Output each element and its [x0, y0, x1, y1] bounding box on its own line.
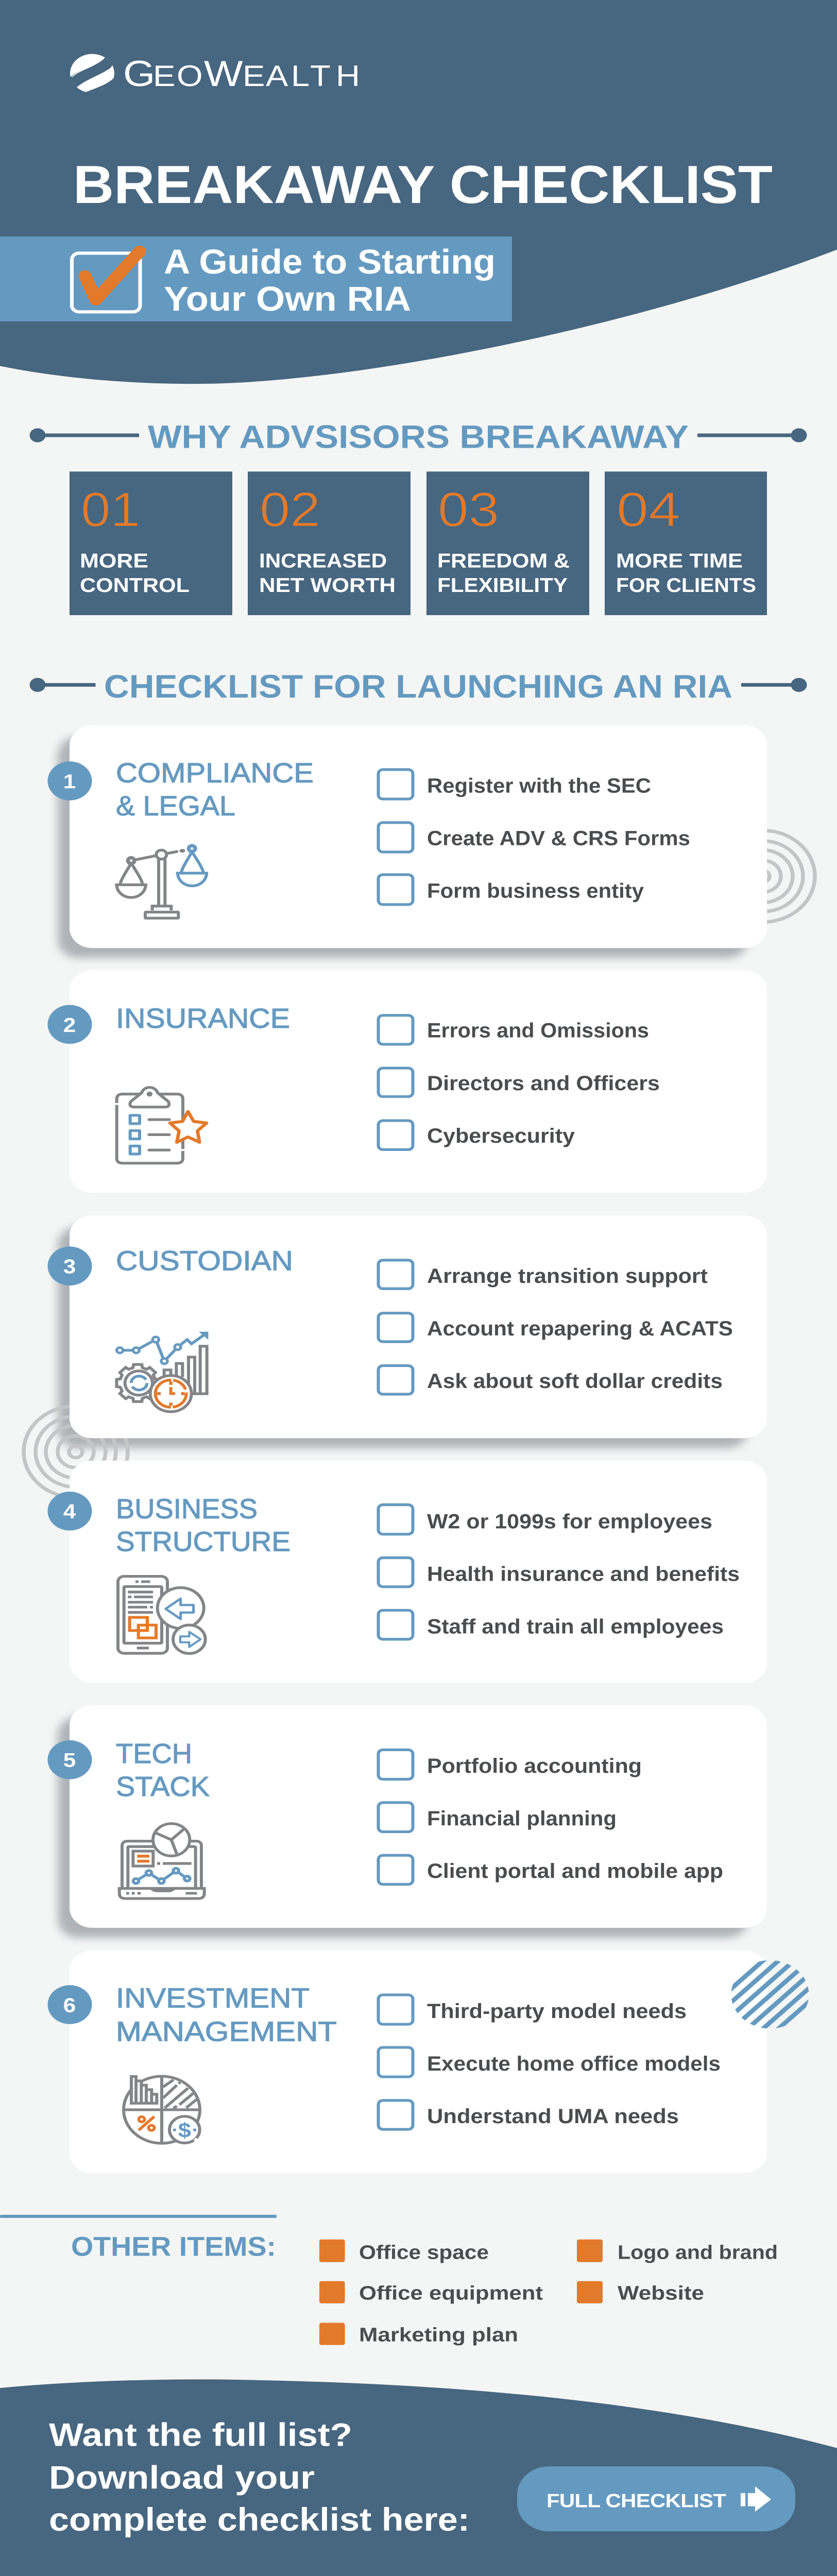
checklist 3 [378, 1260, 733, 1394]
checklist 2: Directors and Officers [427, 1072, 660, 1095]
card 1: compliance and legal [47, 725, 767, 948]
footer call to action text: Download your [49, 2460, 315, 2496]
logo: GeoWealth: EO [153, 60, 203, 92]
card 3: custodian [47, 1215, 767, 1438]
other items list: Marketing plan [359, 2324, 518, 2346]
footer background [0, 2379, 837, 2576]
checklist 2: Cybersecurity [427, 1125, 575, 1147]
reason card 3: FREEDOM & [437, 550, 570, 572]
checklist 6: Execute home office models [427, 2052, 721, 2075]
reason card 4: MORE TIME [616, 550, 743, 572]
header background [0, 0, 837, 384]
section heading: checklist for launching an RIA: CHECKLIST FOR LAUNCHING AN RIA [104, 669, 732, 705]
card 4: business structure [47, 1461, 767, 1683]
reason card 4 [605, 471, 767, 615]
badge 5: 5 [63, 1749, 76, 1771]
footer call to action text: Want the full list? [49, 2417, 352, 2453]
icon: pie chart with percent and dollar: $ [178, 2119, 191, 2142]
checklist 5: Portfolio accounting [427, 1755, 642, 1777]
subtitle band [0, 236, 512, 321]
other items list [319, 2240, 778, 2346]
checklist 2: Errors and Omissions [427, 1019, 649, 1042]
other items list: Website [618, 2282, 704, 2304]
checklist 2 [378, 1015, 660, 1149]
checklist 5: Client portal and mobile app [427, 1860, 723, 1883]
reason card 2: INCREASED [259, 550, 387, 572]
badge 2: 2 [63, 1014, 76, 1036]
reason card 2: NET WORTH [259, 574, 396, 597]
card 6 heading: MANAGEMENT [116, 2016, 337, 2047]
logo: GeoWealth: W [204, 54, 243, 94]
reason card 3 [426, 471, 589, 615]
checklist 3: Arrange transition support [427, 1264, 708, 1287]
icon: chart, gear and clock [116, 1332, 208, 1412]
button: full checklist: FULL CHECKLIST [546, 2490, 726, 2512]
badge 1: 1 [63, 770, 76, 792]
icon: scales [115, 845, 208, 918]
checklist 6: Understand UMA needs [427, 2105, 679, 2127]
checklist 3: Account repapering & ACATS [427, 1317, 733, 1340]
checklist 1: Create ADV & CRS Forms [427, 827, 690, 850]
icon: phone with arrows [118, 1577, 206, 1653]
badge 1 [47, 761, 92, 801]
badge 4 [47, 1492, 92, 1531]
other items heading: OTHER ITEMS: [71, 2231, 276, 2262]
badge 3 [47, 1247, 92, 1285]
other items divider [0, 2215, 277, 2218]
checklist 4: Staff and train all employees [427, 1615, 724, 1638]
card 3 heading: CUSTODIAN [116, 1246, 293, 1276]
icon: clipboard with star [117, 1088, 207, 1163]
reason card 4: FOR CLIENTS [616, 574, 756, 597]
reason card 1: MORE [80, 550, 148, 572]
checklist 3: Ask about soft dollar credits [427, 1369, 723, 1392]
checklist 4: W2 or 1099s for employees [427, 1510, 712, 1533]
title: BREAKAWAY CHECKLIST [73, 155, 773, 214]
other items list: Office space [359, 2241, 489, 2263]
checklist 1: Register with the SEC [427, 774, 651, 797]
decorative rings right [711, 831, 815, 922]
reason card 1: 01 [81, 482, 140, 537]
other items list: Office equipment [359, 2282, 543, 2304]
card 1 heading: COMPLIANCE [116, 758, 314, 789]
checklist 1 [378, 770, 690, 905]
badge 5 [47, 1740, 92, 1779]
card 1 heading: & LEGAL [116, 791, 235, 822]
card 6 heading: INVESTMENT [116, 1983, 310, 2014]
logo: GeoWealth: G [123, 54, 155, 94]
icon: checked box [72, 251, 140, 312]
checklist 4: Health insurance and benefits [427, 1563, 740, 1585]
reason card 2 [248, 471, 411, 615]
reason card 1 [70, 471, 232, 615]
footer call to action text: complete checklist here: [49, 2502, 470, 2538]
reason card 4: 04 [617, 482, 680, 537]
reason card 3: 03 [438, 482, 499, 537]
badge 2 [47, 1005, 92, 1044]
checklist 4 [378, 1505, 740, 1639]
card 2 heading: INSURANCE [116, 1003, 290, 1034]
decorative rings left [24, 1406, 128, 1498]
button: full checklist [517, 2466, 795, 2531]
card 5 heading: STACK [116, 1771, 210, 1802]
checklist 1: Form business entity [427, 879, 644, 902]
icon: logo globe [70, 54, 114, 93]
badge 3: 3 [63, 1256, 76, 1278]
checklist 6 [378, 1995, 721, 2129]
card 2: insurance [47, 970, 767, 1193]
logo: GeoWealth [68, 54, 360, 95]
card 6: investment management [47, 1951, 767, 2173]
icon: laptop with charts [119, 1824, 204, 1899]
other items list: Logo and brand [618, 2241, 778, 2263]
reason card 1: CONTROL [80, 574, 190, 597]
logo: GeoWealth: EALTH [243, 60, 360, 92]
subtitle text: A Guide to Starting [164, 243, 496, 281]
card 5: tech stack [47, 1705, 767, 1928]
checklist 6: Third-party model needs [427, 1999, 687, 2022]
subtitle text: Your Own RIA [164, 280, 411, 318]
icon: arrow [741, 2486, 771, 2512]
icon: pie chart with percent and dollar [124, 2076, 200, 2144]
reason card 2: 02 [260, 482, 320, 537]
checklist 5 [378, 1750, 723, 1884]
card 4 heading: BUSINESS [116, 1494, 258, 1524]
checklist 5: Financial planning [427, 1807, 617, 1830]
badge 4: 4 [63, 1501, 76, 1522]
card 4 heading: STRUCTURE [116, 1527, 291, 1557]
reason card 3: FLEXIBILITY [437, 574, 568, 597]
section heading: why advisors breakaway: WHY ADVSISORS BREAKAWAY [148, 419, 689, 455]
card 5 heading: TECH [116, 1738, 192, 1769]
badge 6 [47, 1985, 92, 2024]
badge 6: 6 [63, 1994, 76, 2016]
decorative hatched circle [731, 1960, 809, 2029]
